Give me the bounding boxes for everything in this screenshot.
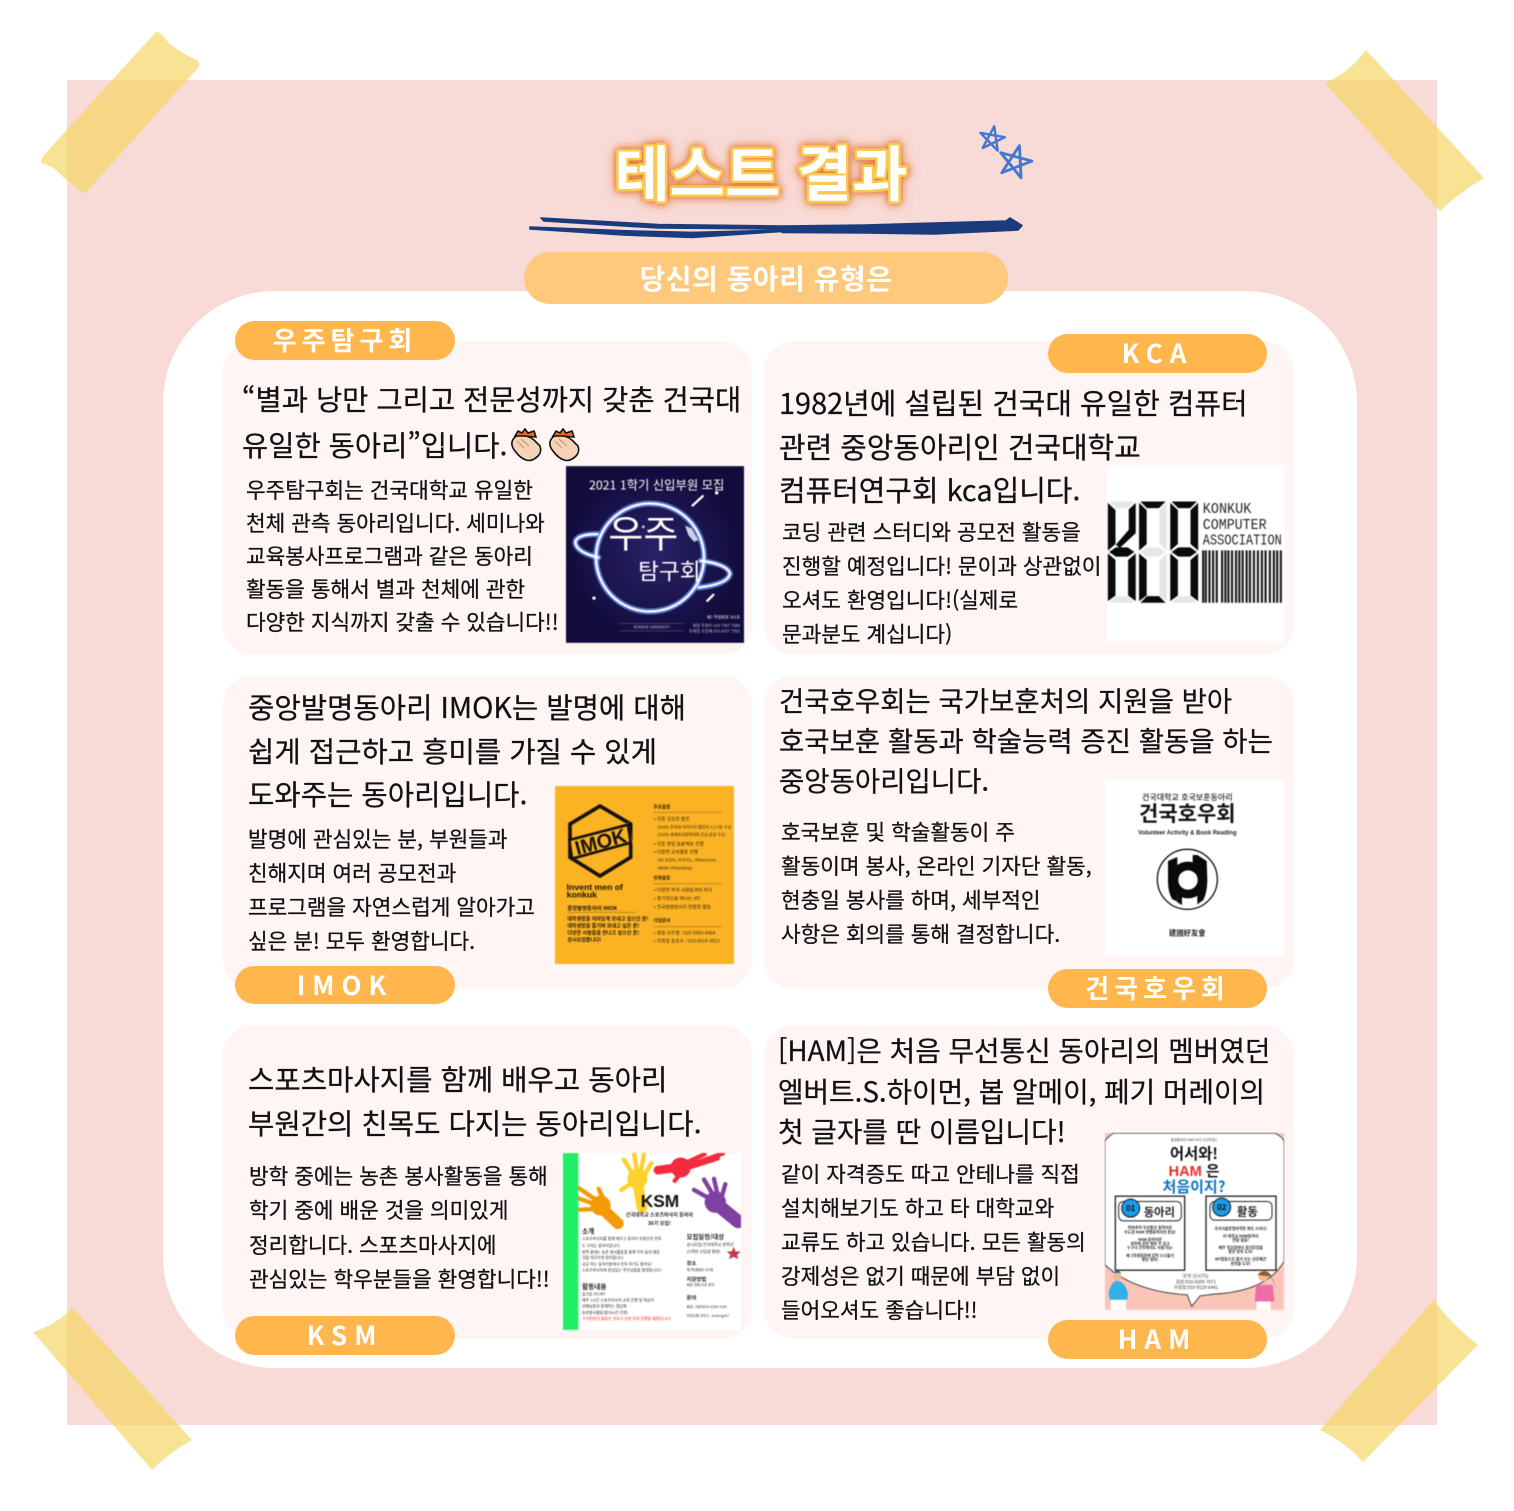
panel: 우주탐구회 bbox=[223, 321, 752, 655]
poster: HAM recruiting: 01 bbox=[1126, 1203, 1136, 1214]
club name pill: KSM bbox=[307, 1316, 383, 1353]
poster: IMOK recruiting: 친목활동 bbox=[653, 874, 671, 881]
poster: KSM recruiting: 소개 bbox=[582, 1226, 594, 1236]
heading text: 쉽게 접근하고 흥미를 가질 수 있게 bbox=[248, 730, 657, 770]
poster: KSM recruiting: 선배님들과 함께하는 정답제 bbox=[582, 1304, 627, 1310]
poster: HAM recruiting: 통한 친목 도모! bbox=[1228, 1249, 1254, 1255]
poster: IMOK recruiting: 중앙발명동아리 IMOK bbox=[567, 904, 618, 912]
poster: 건국호우회 logo: 건국호우회 bbox=[1139, 798, 1236, 828]
club name pill: 건국호우회 bbox=[1085, 969, 1230, 1006]
poster: HAM recruiting: 친목을 도모! bbox=[1231, 1261, 1251, 1267]
club name pill bbox=[235, 966, 455, 1004]
club name pill bbox=[1048, 1320, 1267, 1359]
poster: 우주탐구회 recruiting bbox=[565, 465, 745, 644]
poster: IMOK recruiting: • 전국발명동아리 연합회 활동 bbox=[654, 904, 712, 911]
poster: IMOK recruiting: 대학생활을 즐기며 보내고 싶은 분! bbox=[567, 922, 639, 929]
card background bbox=[764, 675, 1294, 989]
poster: HAM recruiting: 연합 활동! bbox=[1232, 1238, 1250, 1244]
heading text: 유일한 동아리”입니다. bbox=[242, 424, 507, 465]
club name pill: HAM bbox=[1118, 1320, 1197, 1357]
subtitle pill bbox=[524, 252, 1008, 304]
heading text: 도와주는 동아리입니다. bbox=[248, 773, 528, 814]
card background bbox=[764, 1025, 1294, 1339]
poster: HAM recruiting: 과학에 관한 취미 수 있고 bbox=[1130, 1241, 1170, 1247]
poster: KCA logo bbox=[1107, 466, 1284, 640]
poster: HAM recruiting: 동아리 bbox=[1144, 1204, 1175, 1220]
poster: HAM recruiting: 어서와! bbox=[1170, 1142, 1218, 1164]
poster: IMOK recruiting: Adobe Photoshop) bbox=[657, 865, 692, 871]
poster: KSM recruiting: 21학번 신입생 환영! bbox=[687, 1248, 720, 1255]
poster: HAM recruiting: 매주 목요일마다 정기모임을 bbox=[1218, 1245, 1263, 1251]
poster: 우주탐구회 recruiting: 회장 주현우 010 7397 7589 bbox=[693, 622, 740, 629]
heading text: 중앙동아리입니다. bbox=[779, 759, 989, 799]
poster: HAM recruiting: 중앙동아리 HAM 40기 신규모집!! bbox=[1171, 1137, 1217, 1142]
club name pill bbox=[235, 321, 455, 360]
poster: KSM recruiting: 상시모집/건국대학교 한학년 bbox=[687, 1241, 734, 1248]
poster: KSM recruiting: 장소 bbox=[687, 1259, 697, 1267]
poster: HAM recruiting: 문의 상시가능 bbox=[1183, 1273, 1209, 1280]
poster: IMOK recruiting: IMOK bbox=[573, 825, 629, 860]
subtitle pill: 당신의 동아리 유형은 bbox=[639, 258, 893, 298]
poster: KSM recruiting: 학2학생회관 223호 bbox=[687, 1267, 713, 1272]
brush underline bbox=[529, 217, 1023, 238]
body text: 천체 관측 동아리입니다. 세미나와 bbox=[246, 506, 545, 538]
body text: 설치해보기도 하고 타 대학교와 bbox=[781, 1192, 1054, 1223]
poster: IMOK recruiting: • 회장 이주형 : 010-5593-8464 bbox=[654, 930, 716, 937]
poster: IMOK recruiting bbox=[554, 785, 735, 965]
poster: HAM recruiting: 회장:010-6509-7871 bbox=[1176, 1279, 1217, 1286]
poster: KSM recruiting: 등거운 OT/MT bbox=[582, 1292, 606, 1298]
body text: 발명에 관심있는 분, 부원들과 bbox=[248, 823, 508, 854]
panel: KCA bbox=[764, 334, 1294, 655]
heading text: 컴퓨터연구회 kca입니다. bbox=[779, 468, 1080, 510]
poster: KSM recruiting: 문의 bbox=[687, 1294, 697, 1302]
poster: KSM recruiting: 궁금 하는 동아리방에서 친목 하기도 좋아요! bbox=[582, 1262, 652, 1268]
poster: IMOK recruiting: (2020) 전국대 아이디어 챌린지 1,2,3등 수상 bbox=[657, 824, 732, 831]
poster: KSM recruiting: 모집일정/대상 bbox=[687, 1232, 724, 1241]
poster: KSM recruiting: 방학 중에는 농촌 봉사활동을 통해 익히 등의 배운 bbox=[582, 1250, 660, 1256]
poster: KSM recruiting: 것을 마무리게 정리합니다. bbox=[582, 1255, 624, 1261]
body text: 강제성은 없기 때문에 부담 없이 bbox=[781, 1260, 1060, 1291]
poster: KSM recruiting: 스포츠마사지를 함께 배우고 동아리 부원간의 친목 bbox=[582, 1236, 662, 1242]
poster: IMOK recruiting: 가입문의 bbox=[653, 917, 670, 924]
poster: KSM recruiting: 회장: 고현석010-4204-7104 bbox=[687, 1304, 727, 1309]
panel: KSM bbox=[223, 1025, 752, 1355]
poster: IMOK recruiting: • 정기적으로 떠나는 MT bbox=[654, 895, 701, 902]
card background bbox=[223, 675, 752, 989]
poster: 우주탐구회 recruiting: 부회장 오민혜 010 8327 7552 bbox=[689, 628, 741, 635]
body text: 들어오셔도 좋습니다!! bbox=[781, 1294, 978, 1325]
poster: IMOK recruiting: • 다양한 교육활동 진행 bbox=[654, 848, 698, 855]
heading text bbox=[779, 381, 1248, 510]
poster: 우주탐구회 recruiting: 2021 1학기 신입부원 모집 bbox=[589, 476, 724, 494]
body text: 싶은 분! 모두 환영합니다. bbox=[248, 925, 475, 956]
poster: KSM recruiting: 도 다지는 동아리입니다. bbox=[582, 1243, 620, 1249]
heading text: 스포츠마사지를 함께 배우고 동아리 bbox=[248, 1058, 667, 1099]
body text: 현충일 봉사를 하며, 세부적인 bbox=[781, 884, 1041, 915]
poster: HAM recruiting: 제 1학생회관에 있어 드나들기 bbox=[1126, 1253, 1174, 1259]
heading text bbox=[779, 679, 1273, 799]
body text: 다양한 지식까지 갖출 수 있습니다!! bbox=[246, 606, 559, 636]
body text: 같이 자격증도 따고 안테나를 직접 bbox=[781, 1158, 1080, 1189]
poster: 우주탐구회 recruiting: KONKUK UNIVERSITY bbox=[634, 626, 670, 631]
heading text: “별과 낭만 그리고 전문성까지 갖춘 건국대 bbox=[242, 378, 741, 419]
poster: IMOK recruiting: Invent men of bbox=[567, 882, 623, 892]
heading text: 첫 글자를 딴 이름입니다! bbox=[778, 1110, 1066, 1150]
poster: HAM recruiting: HAM 은 bbox=[1169, 1160, 1219, 1181]
poster: HAM recruiting: 부회장:010-8529-6441 bbox=[1174, 1284, 1219, 1291]
heading text: 1982년에 설립된 건국대 유일한 컴퓨터 bbox=[779, 381, 1248, 423]
poster: IMOK recruiting: 상시모집합니다! bbox=[567, 937, 602, 944]
white rounded content panel bbox=[163, 291, 1357, 1368]
body text bbox=[782, 516, 1101, 649]
icon: hand-drawn stars bbox=[979, 125, 1034, 180]
club name pill: KCA bbox=[1122, 334, 1193, 371]
body text: 사항은 회의를 통해 결정합니다. bbox=[781, 918, 1060, 949]
poster: KSM recruiting: 매주 1시간 스포츠마사지 교육 진행 및 복습이 bbox=[582, 1298, 654, 1304]
body text: 학기 중에 배운 것을 의미있게 bbox=[249, 1194, 509, 1225]
poster: 우주탐구회 recruiting: 탐구회 bbox=[638, 554, 701, 586]
body text: 문과분도 계십니다) bbox=[782, 618, 952, 649]
heading text: [HAM]은 처음 무선통신 동아리의 멤버였던 bbox=[778, 1029, 1270, 1069]
club name pill bbox=[1048, 334, 1267, 373]
body text: 교육봉사프로그램과 같은 동아리 bbox=[246, 540, 533, 570]
body text: 오셔도 환영입니다!(실제로 bbox=[782, 584, 1018, 615]
body text: 프로그램을 자연스럽게 알아가고 bbox=[248, 891, 535, 922]
body text bbox=[248, 823, 535, 956]
body text: 방학 중에는 농촌 봉사활동을 통해 bbox=[249, 1160, 548, 1191]
heading text bbox=[248, 686, 686, 814]
poster: HAM recruiting: 아마추어 무선통신 동아리로 bbox=[1128, 1225, 1173, 1231]
poster: HAM recruiting bbox=[1104, 1132, 1285, 1310]
body text bbox=[246, 474, 559, 636]
club name pill bbox=[235, 1316, 455, 1355]
club name pill bbox=[1048, 969, 1267, 1008]
poster: HAM recruiting: 타 대학교 HAM동아리 bbox=[1223, 1234, 1259, 1240]
poster: IMOK recruiting: (3D 프린터, 아두이노, Rhinoceros, bbox=[657, 857, 717, 864]
poster: 건국호우회 logo: 건국대학교 호국보훈동아리 bbox=[1142, 792, 1233, 803]
poster: KSM recruiting: 활동내용 bbox=[582, 1281, 606, 1291]
poster: IMOK recruiting: 다양한 사람들을 만나고 싶으신 분! bbox=[567, 929, 639, 936]
poster: 우주탐구회 recruiting: 제1 학생회관 301호 bbox=[707, 614, 740, 621]
body text: 진행할 예정입니다! 문이과 상관없이 bbox=[782, 550, 1101, 581]
poster: KSM recruiting: 농촌봉사활동(봉사시간 인정) bbox=[582, 1310, 628, 1316]
club name pill: IMOK bbox=[297, 966, 393, 1003]
heading text: 엘버트.S.하이먼, 봅 알메이, 페기 머레이의 bbox=[778, 1070, 1265, 1110]
panel: 건국호우회 bbox=[764, 675, 1294, 1008]
poster: IMOK recruiting: • 부회장 송호수 : 010-6614-3913 bbox=[654, 937, 720, 944]
body text: 코딩 관련 스터디와 공모전 활동을 bbox=[782, 516, 1081, 547]
panel: IMOK bbox=[223, 675, 752, 1004]
body text bbox=[781, 816, 1092, 949]
poster: KSM recruiting bbox=[562, 1152, 742, 1331]
poster: IMOK recruiting: 대학생활을 의미있게 보내고 싶으신 분! bbox=[567, 915, 649, 922]
heading text: 중앙발명동아리 IMOK는 발명에 대해 bbox=[248, 686, 686, 727]
card background bbox=[223, 1025, 752, 1339]
poster: KSM recruiting: 건국대학교 스포츠마사지 동아리 bbox=[626, 1212, 693, 1218]
body text bbox=[249, 1160, 550, 1294]
poster: IMOK recruiting: • 각종 공모전 출전 bbox=[654, 816, 689, 823]
icon: clapping hands bbox=[511, 428, 580, 462]
poster: IMOK recruiting: 주요활동 bbox=[653, 804, 671, 811]
body text bbox=[781, 1158, 1086, 1325]
poster: HAM recruiting: 수도권 HAM 연맹동아리의 중심! bbox=[1124, 1230, 1177, 1236]
poster: IMOK recruiting: (2020) 세계여성발명대회 은상,동상 수상 bbox=[657, 831, 725, 838]
body text: 친해지며 여러 공모전과 bbox=[248, 857, 456, 888]
poster: KSM recruiting: 회장 전화/오픈 문의 bbox=[687, 1282, 714, 1287]
heading text: 부원간의 친목도 다지는 동아리입니다. bbox=[248, 1102, 702, 1143]
card background bbox=[764, 341, 1294, 655]
heading text bbox=[778, 1029, 1270, 1150]
body text: 활동을 통해서 별과 천체에 관한 bbox=[246, 572, 525, 604]
body text: 교류도 하고 있습니다. 모든 활동의 bbox=[781, 1226, 1086, 1257]
poster: KSM recruiting: 카카오톡 아이디 : kodong307 bbox=[687, 1313, 729, 1318]
poster: KSM recruiting: ※이번분의 활동은 코로나 인원 후에 진행될 예정입니다! bbox=[582, 1316, 671, 1322]
heading text bbox=[248, 1058, 702, 1143]
poster: 건국호우회 logo: Volunteer Activity & Book Reading bbox=[1138, 830, 1237, 836]
poster: IMOK recruiting: • 다양한 학과 사람들과의 회식 bbox=[654, 886, 712, 893]
poster: KSM recruiting: KSM bbox=[641, 1191, 679, 1211]
body text: 호국보훈 및 학술활동이 주 bbox=[781, 816, 1015, 847]
card background bbox=[223, 341, 752, 655]
poster: HAM recruiting: HAM 동아리란 bbox=[1138, 1237, 1162, 1243]
poster: KSM recruiting: 지원방법 bbox=[687, 1275, 706, 1283]
poster: HAM recruiting: 처음이지? bbox=[1163, 1176, 1225, 1197]
heading text bbox=[242, 378, 741, 465]
body text: 관심있는 학우분들을 환영합니다!! bbox=[249, 1263, 550, 1294]
poster: 우주탐구회 recruiting: 우주 bbox=[608, 504, 678, 558]
heading text: 건국호우회는 국가보훈처의 지원을 받아 bbox=[779, 679, 1232, 719]
heading text: 관련 중앙동아리인 건국대학교 bbox=[779, 424, 1141, 466]
heading text: 호국보훈 활동과 학술능력 증진 활동을 하는 bbox=[779, 719, 1273, 759]
poster: KCA logo: COMPUTER bbox=[1203, 518, 1267, 534]
poster: HAM recruiting: 활동 bbox=[1237, 1204, 1258, 1220]
title: 테스트 결과 bbox=[615, 127, 907, 214]
poster: IMOK recruiting: konkuk bbox=[567, 889, 597, 899]
poster: KSM recruiting: 36기 모집! bbox=[648, 1220, 671, 1227]
poster: HAM recruiting: 국가기술증명자격증 취득 스터디! bbox=[1214, 1226, 1268, 1232]
body text: 정리합니다. 스포츠마사지에 bbox=[249, 1229, 497, 1260]
poster: 건국호우회 logo bbox=[1106, 780, 1284, 956]
poster: KCA logo: KONKUK bbox=[1203, 502, 1251, 518]
club name pill: 우주탐구회 bbox=[273, 321, 417, 358]
poster: HAM recruiting: MT활동으로 즐거 또는 선후배간 bbox=[1215, 1257, 1267, 1263]
body text: 활동이며 봉사, 온라인 기자단 활동, bbox=[781, 850, 1092, 881]
poster: HAM recruiting: 02 bbox=[1217, 1202, 1227, 1213]
poster: IMOK recruiting: • 각종 창업 프로젝트 진행 bbox=[654, 840, 704, 847]
poster: HAM recruiting: 누구나 간부까지도 사용가능! bbox=[1127, 1245, 1173, 1251]
poster: KSM recruiting: 스포츠마사지에 관심있는 학우님들을 환영합니다!! bbox=[582, 1268, 662, 1274]
panel: HAM bbox=[764, 1025, 1294, 1359]
poster: 건국호우회 logo: 建國好友會 bbox=[1169, 927, 1206, 938]
poster: HAM recruiting: 편한 위치! bbox=[1142, 1257, 1159, 1263]
body text: 우주탐구회는 건국대학교 유일한 bbox=[246, 474, 533, 504]
